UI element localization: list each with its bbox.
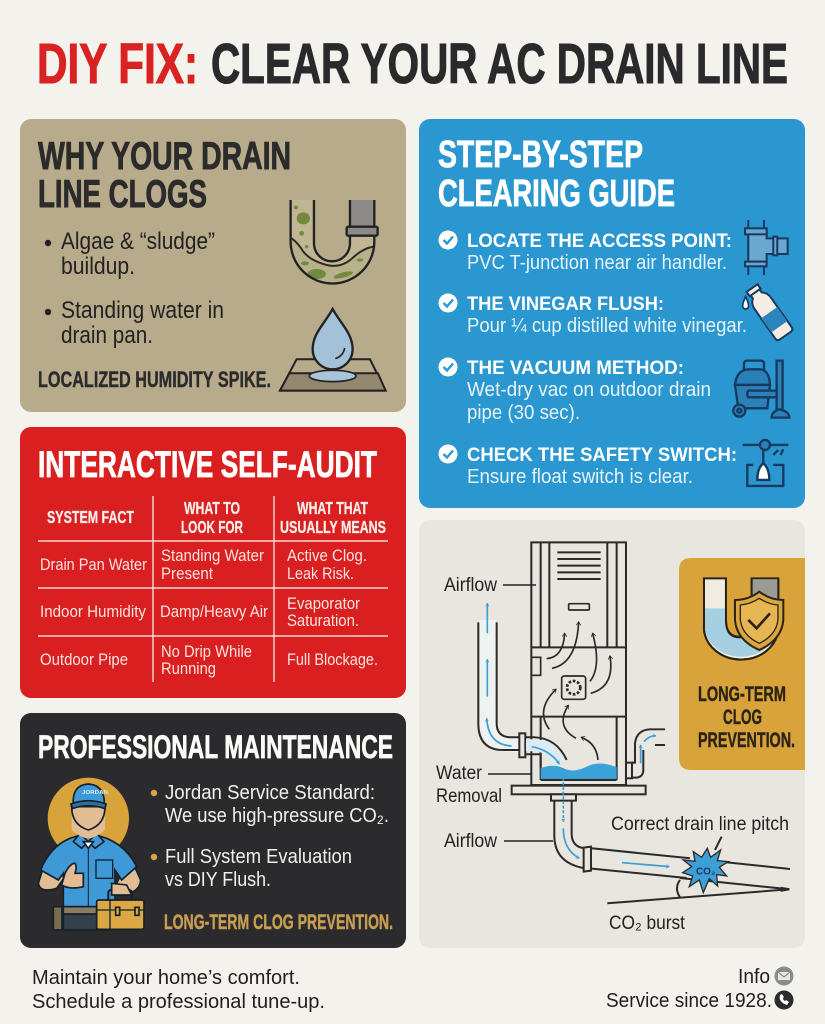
row: indoor humidity: Saturation. bbox=[287, 612, 359, 630]
panel: step-by-step clearing guide bbox=[419, 119, 805, 508]
panel: why your drain line clogs bbox=[20, 119, 406, 412]
heading: step-by-step clearing guide: CLEARING GUIDE bbox=[438, 173, 675, 215]
table header row: WHAT THAT bbox=[297, 498, 368, 518]
icon: water drop in pan bbox=[280, 309, 386, 391]
step 4 bbox=[438, 444, 737, 488]
row: drain pan water bbox=[40, 547, 367, 583]
heading: interactive self-audit: INTERACTIVE SELF-AUDIT bbox=[38, 444, 377, 485]
footer: call to action: Schedule a professional tune-up. bbox=[32, 990, 325, 1013]
table header row: USUALLY MEANS bbox=[280, 517, 386, 537]
callout: long-term clog prevention: LONG-TERM CLOG PREVENTION. bbox=[164, 911, 393, 934]
row: outdoor pipe: No Drip While bbox=[161, 643, 252, 661]
panel: system diagram bbox=[419, 520, 805, 948]
row: outdoor pipe: Outdoor Pipe bbox=[40, 651, 128, 669]
bullet: standing water bbox=[45, 297, 224, 349]
panel: interactive self-audit bbox=[20, 427, 406, 698]
labels: diagram callouts: Water bbox=[436, 763, 483, 784]
heading: why your drain line clogs bbox=[38, 135, 291, 216]
heading: step-by-step clearing guide: STEP-BY-STEP bbox=[438, 134, 643, 176]
callout: long-term clog prevention bbox=[679, 558, 805, 770]
icon: mail bbox=[774, 966, 794, 986]
labels: diagram callouts: Airflow bbox=[444, 575, 497, 596]
row: indoor humidity: Indoor Humidity bbox=[40, 603, 147, 621]
row: drain pan water: Leak Risk. bbox=[287, 565, 354, 583]
row: indoor humidity: Damp/Heavy Air bbox=[160, 603, 268, 621]
bullet: full system evaluation: vs DIY Flush. bbox=[165, 868, 271, 891]
labels: diagram callouts: Correct drain line pitch bbox=[611, 814, 789, 835]
table header row: LOOK FOR bbox=[181, 517, 243, 537]
step 3: Wet-dry vac on outdoor drain bbox=[467, 378, 711, 401]
step 1: PVC T-junction near air handler. bbox=[467, 251, 727, 274]
callout: localized humidity spike: LOCALIZED HUMIDITY SPIKE. bbox=[38, 367, 271, 392]
icon: T-junction bbox=[745, 220, 788, 275]
step 2: Pour ¼ cup distilled white vinegar. bbox=[467, 314, 747, 337]
step 4: Ensure float switch is clear. bbox=[467, 465, 693, 488]
icon: clogged pipe bbox=[291, 200, 378, 283]
bullet: Jordan service standard: We use high-pressure CO₂. bbox=[165, 804, 389, 827]
drain pan water bbox=[541, 763, 617, 780]
bullet: algae and sludge: Algae & “sludge” bbox=[61, 228, 215, 255]
right condensate pipe bbox=[626, 763, 632, 778]
row: drain pan water: Standing Water bbox=[161, 547, 264, 565]
step 3: THE VACUUM METHOD: bbox=[467, 357, 684, 379]
footer: contact: Info bbox=[738, 965, 770, 988]
step 2: THE VINEGAR FLUSH: bbox=[467, 293, 664, 315]
table header row: WHAT TO bbox=[184, 498, 240, 518]
icon: pipe with shield bbox=[704, 578, 783, 660]
AC unit cabinet bbox=[531, 542, 626, 785]
bullet: standing water: Standing water in bbox=[61, 297, 224, 324]
icon: technician bbox=[38, 778, 144, 930]
heading: why your drain line clogs: WHY YOUR DRAIN bbox=[38, 135, 291, 178]
labels: diagram callouts: Removal bbox=[436, 786, 502, 807]
bullet: Jordan service standard: Jordan Service Standard: bbox=[165, 781, 375, 804]
heading: step-by-step clearing guide bbox=[438, 134, 675, 215]
CO2 burst star bbox=[683, 848, 728, 893]
left riser pipe bbox=[487, 620, 520, 744]
labels: diagram callouts: CO₂ burst bbox=[609, 913, 686, 934]
step 2 bbox=[438, 293, 747, 337]
step 3 bbox=[438, 357, 711, 424]
bullet: algae and sludge: buildup. bbox=[61, 253, 135, 280]
row: outdoor pipe: Full Blockage. bbox=[287, 651, 378, 669]
bullet: standing water: drain pan. bbox=[61, 322, 153, 349]
heading: professional maintenance: PROFESSIONAL MAINTENANCE bbox=[38, 729, 393, 765]
blue flow arrows bbox=[487, 603, 669, 867]
labels: diagram callouts bbox=[436, 575, 789, 934]
bullet: Jordan service standard bbox=[151, 781, 389, 827]
row: drain pan water: Active Clog. bbox=[287, 547, 367, 565]
icon: phone bbox=[774, 990, 794, 1010]
row: outdoor pipe: Running bbox=[161, 660, 216, 678]
row: indoor humidity bbox=[40, 595, 360, 630]
bullet: full system evaluation bbox=[151, 845, 352, 891]
step 4: CHECK THE SAFETY SWITCH: bbox=[467, 444, 737, 466]
callout: long-term clog prevention: CLOG bbox=[723, 706, 762, 729]
step 1: LOCATE THE ACCESS POINT: bbox=[467, 230, 732, 252]
table header row bbox=[47, 498, 386, 537]
footer: call to action bbox=[32, 966, 325, 1013]
diagram: AC unit and drain line bbox=[478, 542, 790, 903]
footer: call to action: Maintain your home’s comfort. bbox=[32, 966, 300, 989]
heading: why your drain line clogs: LINE CLOGS bbox=[38, 173, 207, 216]
footer: contact bbox=[606, 965, 794, 1012]
outlet drain pipe bbox=[554, 801, 587, 868]
black airflow arrows bbox=[544, 622, 611, 760]
cap label on technician: JORDAN bbox=[82, 790, 108, 796]
step 3: pipe (30 sec). bbox=[467, 401, 580, 424]
icon: wet-dry vacuum bbox=[733, 361, 789, 418]
row: drain pan water: Present bbox=[161, 565, 213, 583]
icon: vinegar bottle bbox=[743, 282, 794, 341]
step 1 bbox=[438, 230, 732, 274]
callout: long-term clog prevention: LONG-TERM bbox=[698, 683, 786, 706]
table header row: SYSTEM FACT bbox=[47, 507, 134, 527]
labels: diagram callouts: Airflow bbox=[444, 831, 497, 852]
panel: professional maintenance bbox=[20, 713, 406, 948]
footer: contact: Service since 1928. bbox=[606, 989, 772, 1012]
row: indoor humidity: Evaporator bbox=[287, 595, 360, 613]
table bbox=[38, 496, 388, 682]
row: drain pan water: Drain Pan Water bbox=[40, 556, 147, 574]
bullet: algae and sludge bbox=[45, 228, 215, 280]
bullet: full system evaluation: Full System Evaluation bbox=[165, 845, 352, 868]
icon: float switch bbox=[743, 440, 788, 486]
title: DIY FIX: bbox=[37, 32, 198, 96]
CO2 burst star: CO₂ bbox=[696, 867, 715, 878]
row: outdoor pipe bbox=[40, 643, 378, 678]
